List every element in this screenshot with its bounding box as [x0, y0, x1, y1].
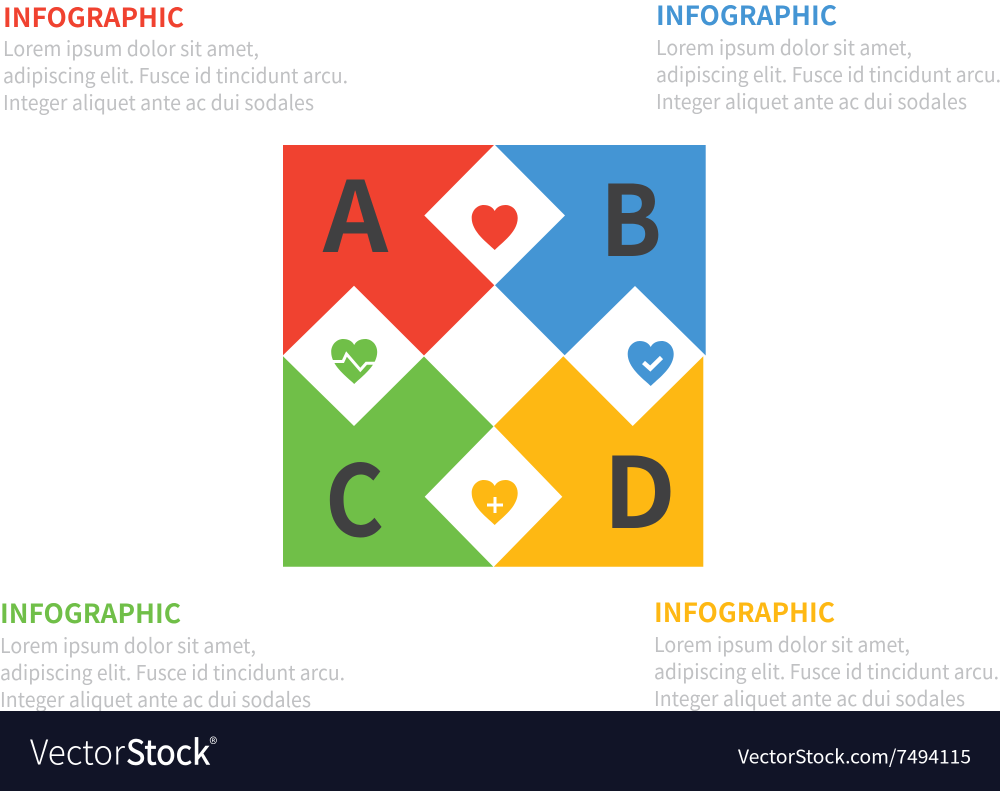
panel: C green	[283, 356, 494, 567]
body text: B	[656, 31, 1000, 115]
text block: B	[656, 0, 1000, 115]
footer logo: Stock	[126, 726, 210, 774]
icon: yellow heart with plus	[472, 480, 518, 525]
body text: C: Integer aliquet ante ac dui sodales	[0, 683, 311, 713]
icon: green heart with pulse	[329, 339, 380, 384]
heading: D: INFOGRAPHIC	[654, 591, 835, 630]
footer logo: Vector	[30, 726, 126, 774]
icon: red heart	[472, 205, 518, 250]
body text: C: Lorem ipsum dolor sit amet,	[0, 629, 256, 659]
footer bar	[0, 711, 1000, 791]
text block: D	[654, 591, 999, 712]
body text: A: Integer aliquet ante ac dui sodales	[3, 86, 314, 116]
letter D: D	[603, 415, 676, 557]
letter C: C	[325, 423, 384, 565]
text block: C	[0, 592, 345, 713]
body text: D	[654, 628, 999, 712]
central square diagram	[283, 139, 706, 567]
body text: D: Integer aliquet ante ac dui sodales	[654, 682, 965, 712]
panel: A red	[283, 145, 494, 356]
letter A: A	[322, 139, 389, 281]
footer logo: ®	[210, 730, 218, 755]
panel: B blue	[495, 145, 706, 356]
footer logo	[30, 726, 218, 774]
icon: blue heart with check	[628, 341, 674, 386]
text block: A	[3, 0, 348, 116]
body text: A: Lorem ipsum dolor sit amet,	[3, 32, 259, 62]
body text: D: Lorem ipsum dolor sit amet,	[654, 628, 910, 658]
panel: D yellow	[494, 356, 703, 567]
letter B: B	[600, 143, 662, 285]
body text: C	[0, 629, 345, 713]
body text: A	[3, 32, 348, 116]
heading: C: INFOGRAPHIC	[0, 592, 181, 631]
body text: B: Lorem ipsum dolor sit amet,	[656, 31, 912, 61]
footer url: VectorStock.com/7494115	[738, 743, 971, 770]
body text: B: Integer aliquet ante ac dui sodales	[656, 85, 967, 115]
body text: C: adipiscing elit. Fusce id tincidunt arcu.	[0, 656, 345, 686]
footer background	[0, 711, 1000, 791]
body text: A: adipiscing elit. Fusce id tincidunt arcu.	[3, 59, 348, 89]
